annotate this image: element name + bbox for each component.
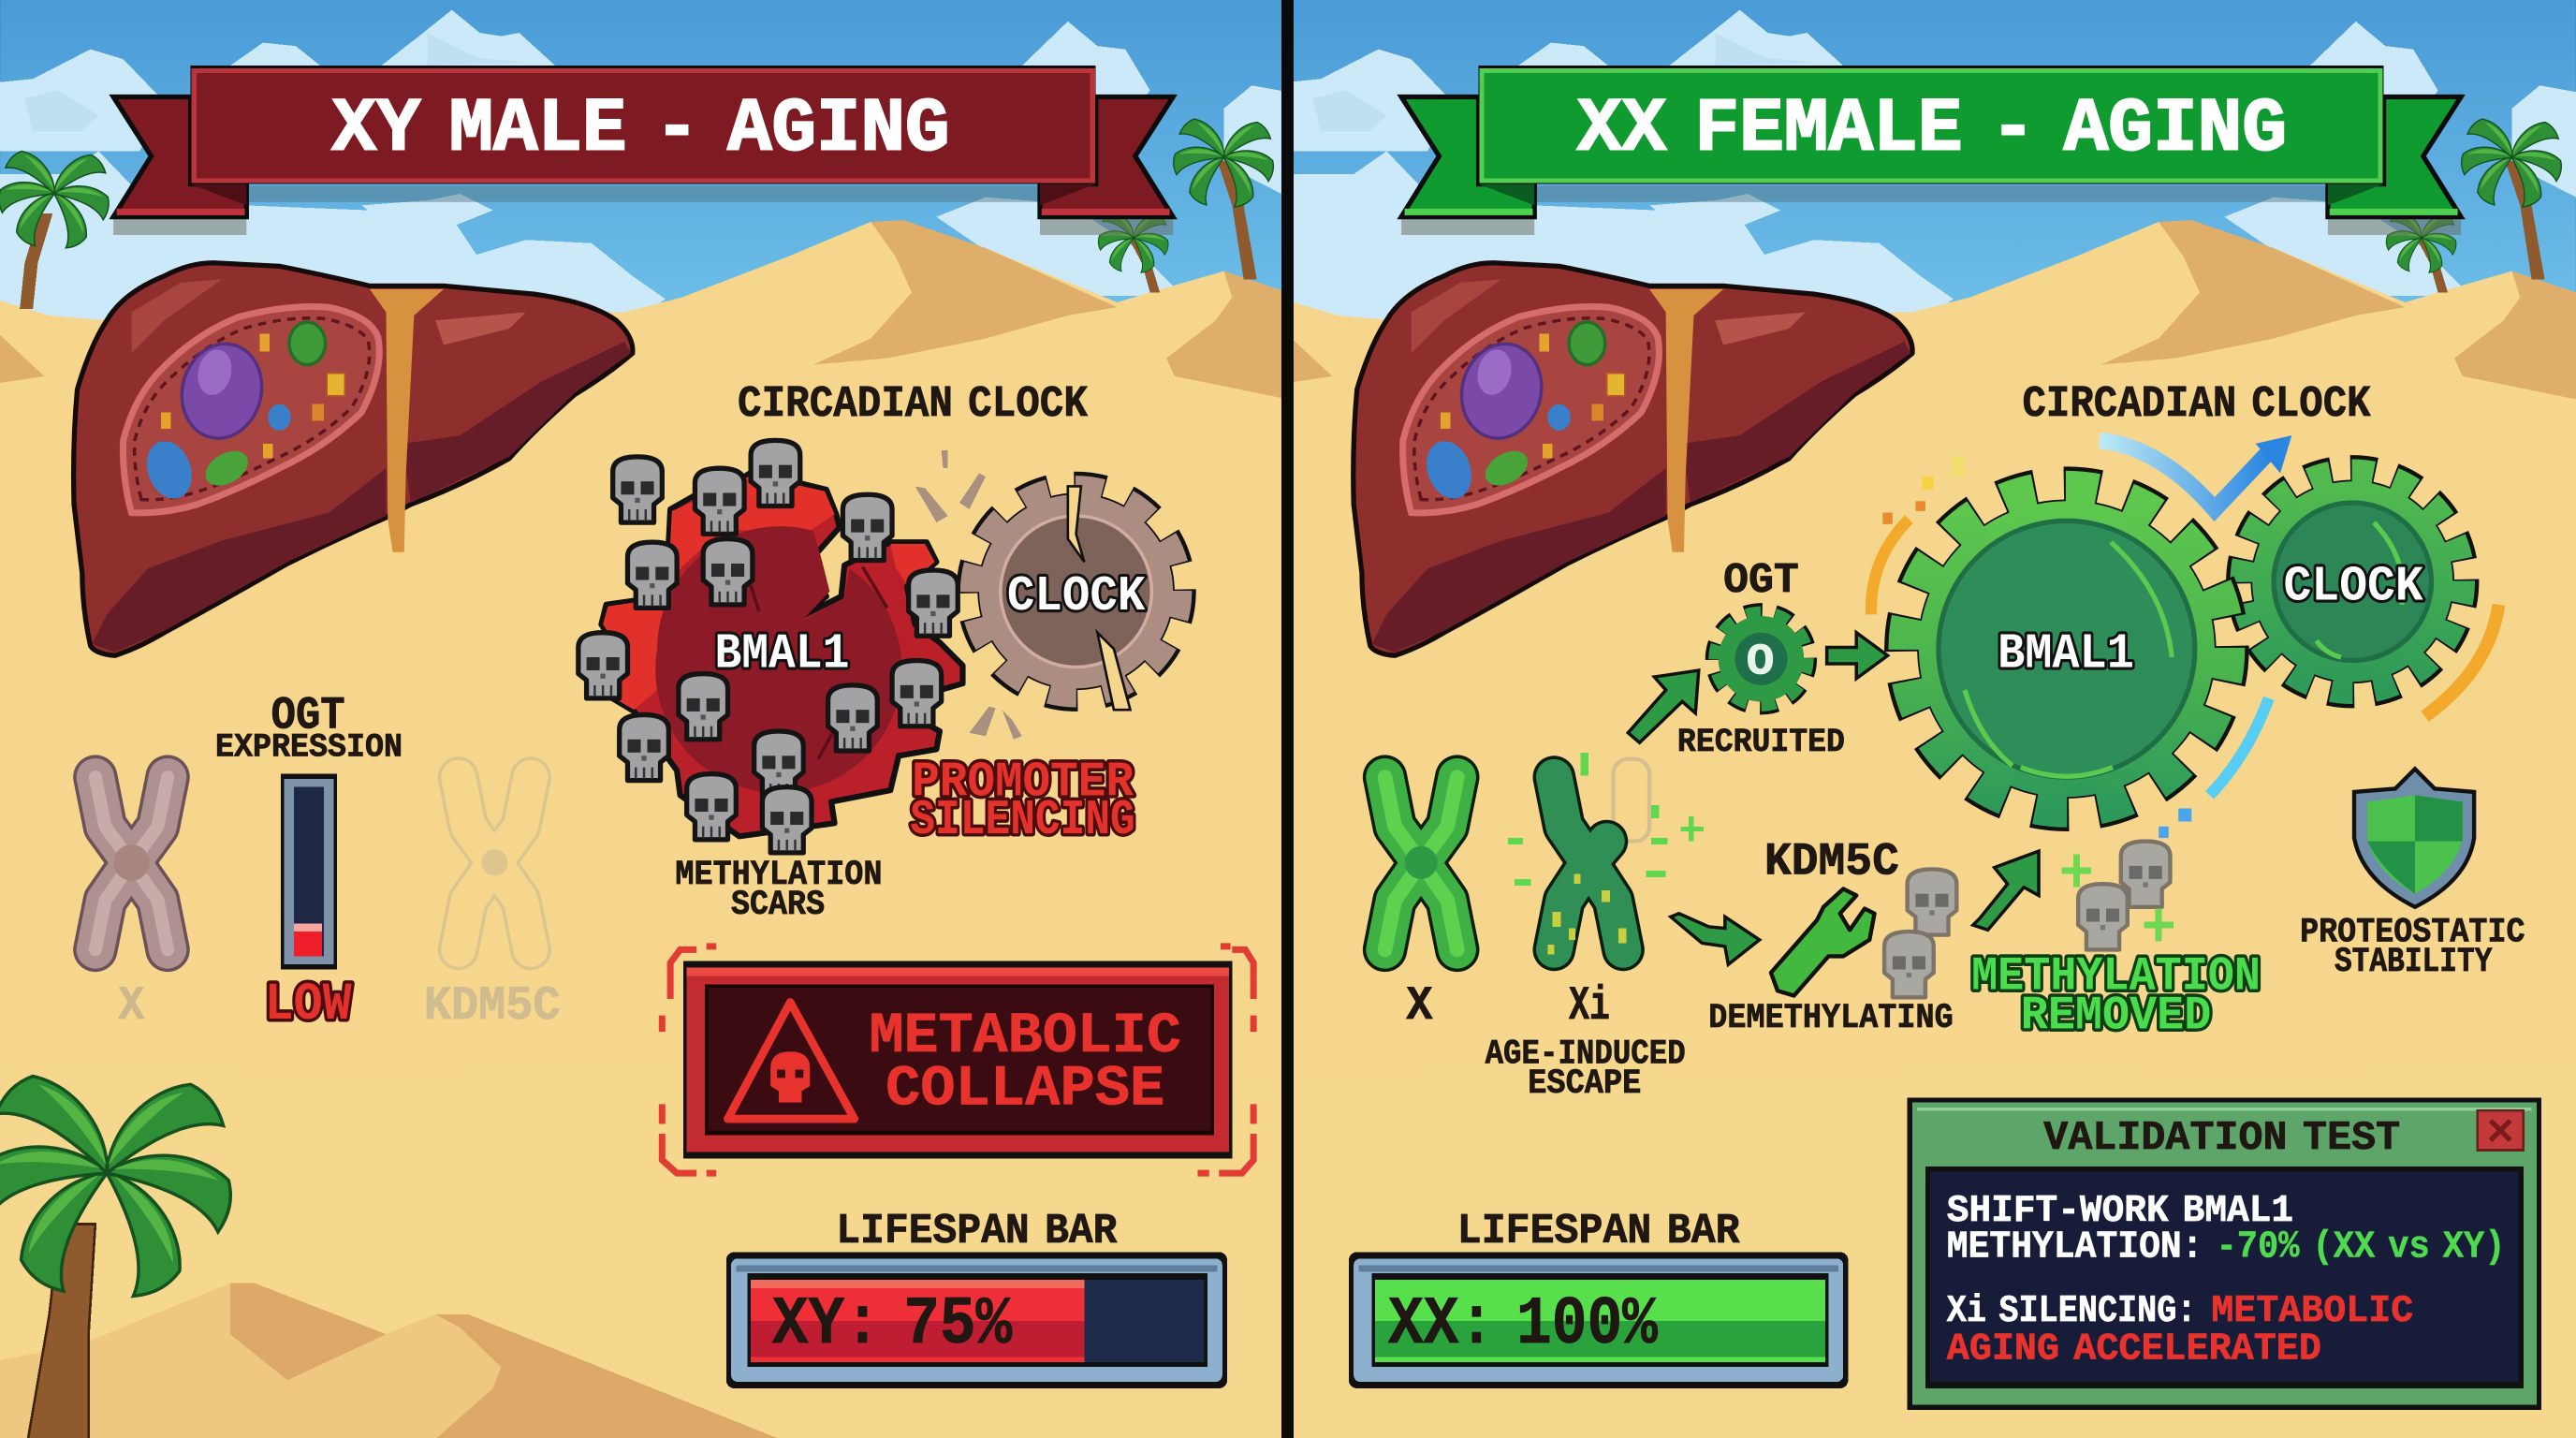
arrow: OGT to BMAL1 xyxy=(1827,633,1888,679)
label: recruited: RECRUITED xyxy=(1677,724,1845,761)
lifespan bar: XY 75% xyxy=(726,1252,1227,1388)
label: methylation scars: METHYLATION xyxy=(675,856,883,895)
gear: BMAL1 healthy xyxy=(1908,490,2226,808)
icon: warning triangle with skull xyxy=(728,1003,855,1119)
gear: CLOCK healthy xyxy=(2244,473,2461,690)
icon: Xi escaping chromosome xyxy=(1508,753,1704,955)
gear label: BMAL1: BMAL1 xyxy=(1998,626,2134,682)
title: XY male aging: XY MALE - AGING xyxy=(332,88,949,173)
arrow: blue streak xyxy=(2159,698,2269,838)
icon: skulls being removed xyxy=(1884,842,2170,997)
arrow: orange rotation arc left xyxy=(1871,457,1965,614)
close button xyxy=(2478,1110,2524,1151)
label: OGT expression: EXPRESSION xyxy=(215,728,402,766)
label: age-induced escape xyxy=(1486,1035,1686,1104)
label: proteostatic stability: PROTEOSTATIC xyxy=(2300,914,2525,953)
label: age-induced escape: ESCAPE xyxy=(1528,1064,1641,1104)
gear: OGT xyxy=(1715,613,1808,705)
text: Xi silencing: Xi SILENCING: xyxy=(1947,1290,2197,1333)
divider between panels xyxy=(1281,0,1294,1438)
label: proteostatic stability: STABILITY xyxy=(2334,943,2493,982)
text: shift-work methylation: -70% (XX vs XY) xyxy=(2217,1226,2505,1269)
panel: XY male aging xyxy=(0,66,1253,1438)
text: metabolic collapse: METABOLIC xyxy=(869,1005,1181,1069)
decorative lower-left dunes xyxy=(0,1284,781,1438)
text: shift-work methylation: METHYLATION: xyxy=(1947,1226,2203,1269)
label: OGT: OGT xyxy=(1723,556,1799,605)
text: Xi silencing: AGING ACCELERATED xyxy=(1947,1328,2321,1371)
heading: validation test: VALIDATION TEST xyxy=(2043,1115,2400,1162)
label: methylation scars xyxy=(675,856,883,925)
label: KDM5C faded: KDM5C xyxy=(424,980,561,1034)
gear label: CLOCK: CLOCK xyxy=(1007,568,1146,624)
icon: ghost chromosome outline xyxy=(459,777,531,949)
icon: large palm tree xyxy=(0,1062,236,1438)
icon: X chromosome xyxy=(1385,777,1457,949)
gear label: CLOCK: CLOCK xyxy=(2284,559,2423,615)
label: age-induced escape: AGE-INDUCED xyxy=(1486,1035,1686,1075)
icon: small palm tree xyxy=(0,145,110,309)
label: KDM5C: KDM5C xyxy=(1764,836,1899,888)
arrow: orange rotation arc right xyxy=(2424,605,2498,716)
liver with cell xyxy=(1354,263,1912,655)
gauge: OGT expression level low xyxy=(281,774,337,969)
text: Xi silencing xyxy=(1947,1290,2413,1371)
panel: XY male background xyxy=(0,0,1288,1438)
arrow: Xi to OGT xyxy=(1628,670,1699,742)
label: demethylating: DEMETHYLATING xyxy=(1708,999,1954,1038)
label: OGT expression xyxy=(215,689,402,766)
label: lifespan bar: LIFESPAN BAR xyxy=(1457,1207,1740,1255)
gear: CLOCK broken xyxy=(971,486,1181,710)
text: Xi silencing: METABOLIC xyxy=(2211,1290,2413,1333)
label: OGT expression: OGT xyxy=(271,689,345,741)
panel: XX female aging xyxy=(1349,66,2541,1410)
gear: OGT: O xyxy=(1747,638,1774,688)
label: methylation removed: METHYLATION xyxy=(1971,951,2261,1005)
gear: BMAL1 with methylation skulls xyxy=(578,440,963,853)
label: methylation scars: SCARS xyxy=(731,886,825,925)
text: metabolic collapse xyxy=(869,1005,1181,1122)
label: proteostatic stability xyxy=(2300,914,2525,982)
heading: circadian clock: CIRCADIAN CLOCK xyxy=(738,380,1088,430)
label: promoter silencing: SILENCING xyxy=(910,792,1135,848)
arrow: blue rotation arrow xyxy=(2100,435,2291,509)
label: X: X xyxy=(118,980,145,1034)
heading: circadian clock: CIRCADIAN CLOCK xyxy=(2022,380,2371,430)
panel: XX female background xyxy=(1288,0,2576,1438)
arrow: demethylation to BMAL1 xyxy=(1973,851,2039,930)
arrow: Xi to KDM5C xyxy=(1671,914,1760,964)
label: X: X xyxy=(1406,980,1433,1034)
panel: validation test xyxy=(1908,1097,2541,1410)
text: metabolic collapse: COLLAPSE xyxy=(886,1057,1164,1122)
debris shards xyxy=(915,450,1022,740)
icon: wrench xyxy=(1771,888,1875,996)
text: shift-work methylation xyxy=(1947,1190,2505,1269)
callout: metabolic collapse xyxy=(662,946,1253,1173)
skull markers xyxy=(578,440,958,853)
label: promoter silencing xyxy=(910,754,1135,848)
bar value: XY 75%: XY: 75% xyxy=(772,1286,1013,1363)
icon: faded X chromosome xyxy=(95,777,168,949)
label: LOW: LOW xyxy=(265,975,352,1034)
label: methylation removed xyxy=(1971,951,2261,1044)
liver with cell xyxy=(74,263,633,655)
title: XX female aging: XX FEMALE - AGING xyxy=(1577,88,2287,173)
text: shift-work methylation: SHIFT-WORK BMAL1 xyxy=(1947,1190,2293,1233)
icon: shield xyxy=(2354,769,2474,907)
bar value: XX 100%: XX: 100% xyxy=(1388,1286,1659,1363)
label: lifespan bar: LIFESPAN BAR xyxy=(836,1207,1118,1255)
lifespan bar: XX 100% xyxy=(1349,1252,1848,1388)
sparkles xyxy=(2062,855,2174,942)
gear label: BMAL1: BMAL1 xyxy=(714,626,849,682)
label: methylation removed: REMOVED xyxy=(2021,990,2211,1044)
banner: XX female aging xyxy=(1401,66,2461,235)
label: Xi: Xi xyxy=(1569,980,1610,1034)
label: promoter silencing: PROMOTER xyxy=(912,754,1134,810)
banner: XY male aging xyxy=(113,66,1173,235)
